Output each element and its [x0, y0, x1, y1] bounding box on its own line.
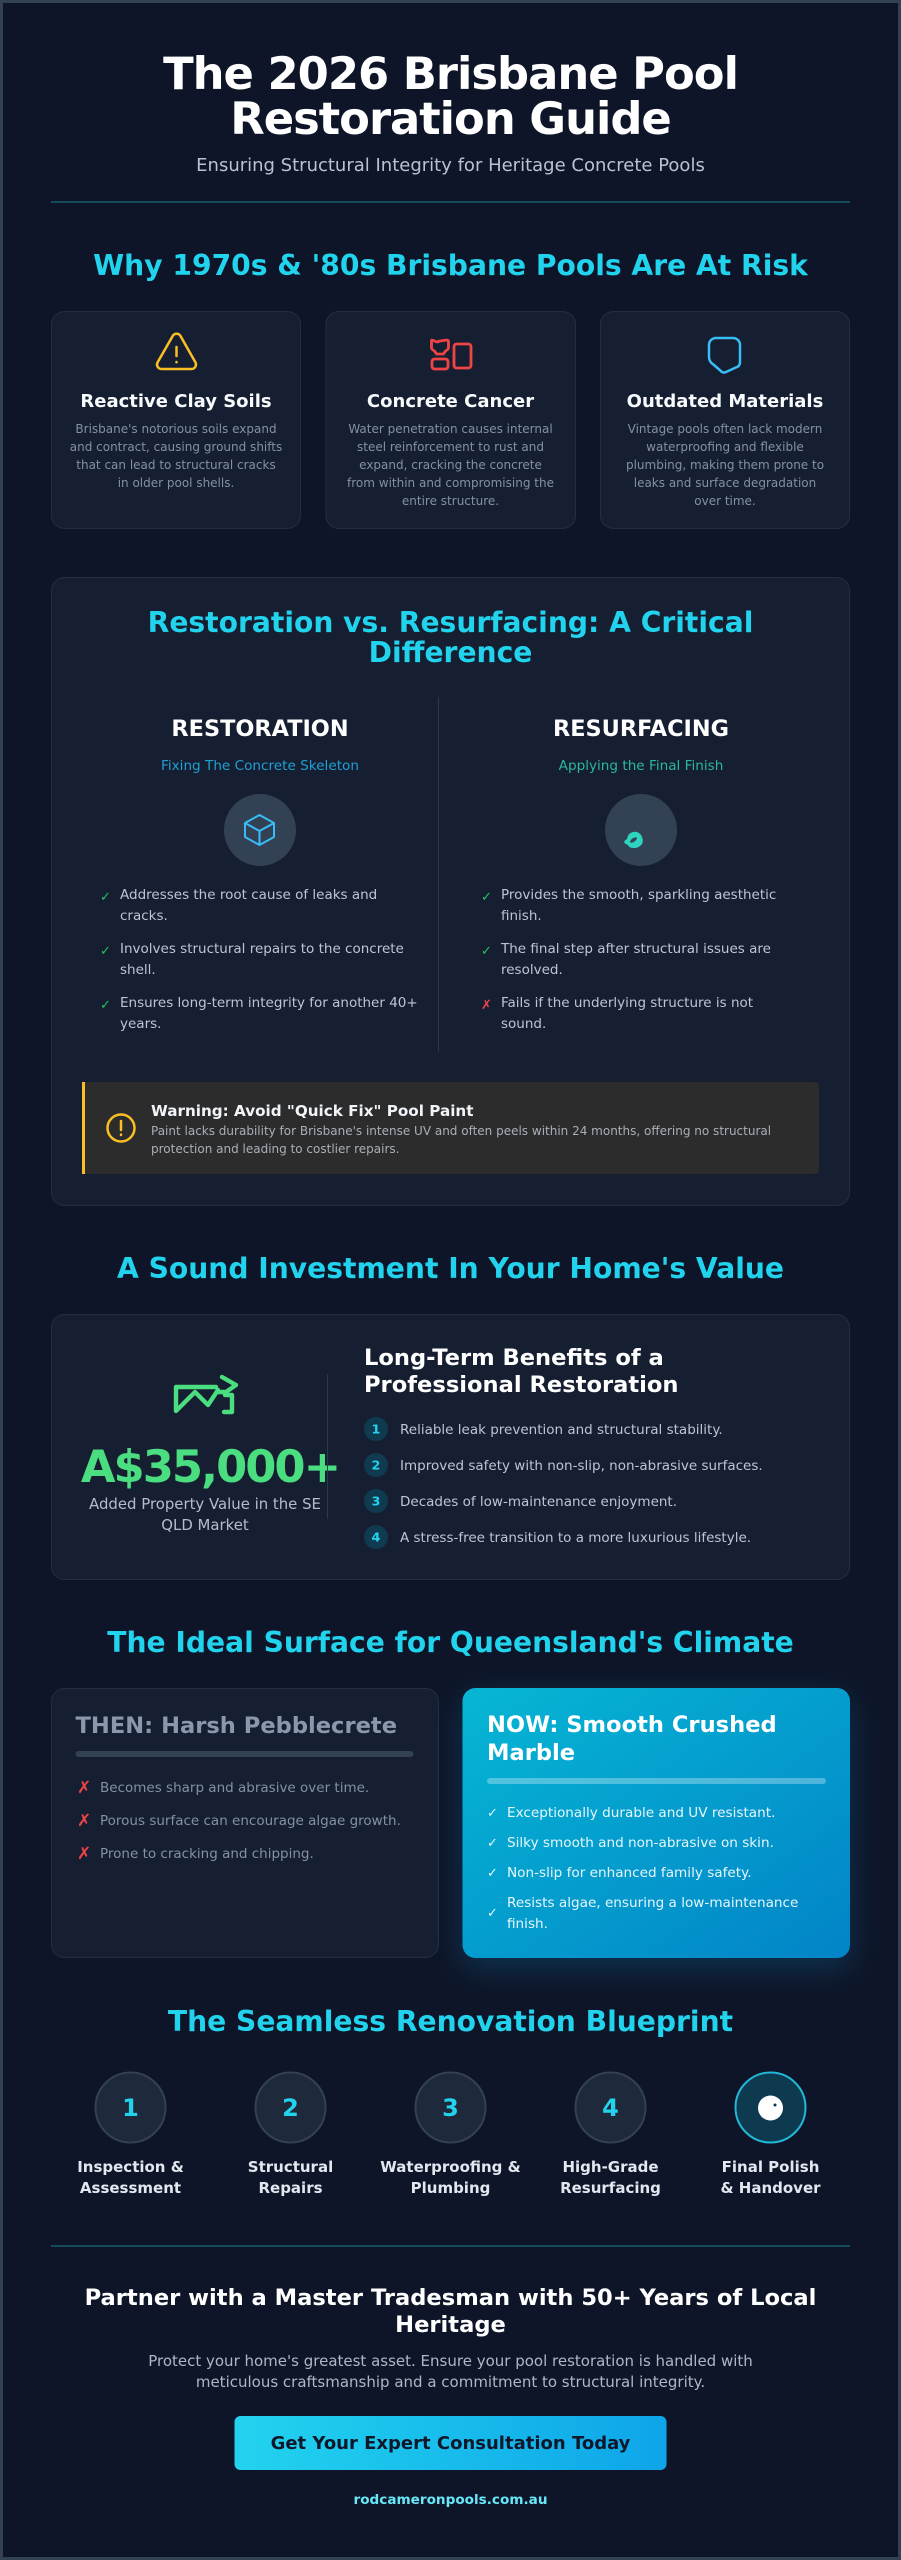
benefits list: 3	[372, 1494, 380, 1510]
step 1: Inspection &	[77, 2158, 184, 2176]
now list	[487, 1805, 798, 1932]
card text	[347, 422, 554, 508]
now list: ✓	[487, 1866, 498, 1881]
resurfacing list: Fails if the underlying structure is not	[501, 995, 753, 1011]
icon: warning triangle	[157, 334, 196, 369]
title	[163, 47, 738, 145]
step 4: Resurfacing	[560, 2179, 661, 2197]
step 1: 1	[122, 2094, 139, 2122]
benefits list: Decades of low-maintenance enjoyment.	[400, 1494, 677, 1510]
resurfacing list: sound.	[501, 1016, 546, 1032]
then list: Prone to cracking and chipping.	[100, 1846, 314, 1862]
panel: investment	[52, 1314, 850, 1580]
step 2: Structural	[248, 2158, 333, 2176]
step 2: 2	[282, 2094, 299, 2122]
restoration list: cracks.	[120, 908, 168, 924]
restoration list: Addresses the root cause of leaks and	[120, 887, 377, 903]
section heading: investment: A Sound Investment In Your Home's Value	[117, 1252, 784, 1285]
then list	[77, 1778, 401, 1864]
now list: Exceptionally durable and UV resistant.	[507, 1805, 775, 1821]
card text: in older pool shells.	[118, 476, 234, 490]
column subheading: Applying the Final Finish	[559, 758, 723, 774]
panel: restoration vs resurfacing	[52, 578, 850, 1206]
panel heading	[487, 1712, 777, 1766]
icon: shield	[709, 338, 740, 372]
card text	[70, 422, 282, 490]
panel heading: Difference	[369, 636, 532, 669]
cta text	[148, 2352, 753, 2391]
card text: entire structure.	[402, 494, 499, 508]
then list: Porous surface can encourage algae growth.	[100, 1813, 401, 1829]
title: The 2026 Brisbane Pool	[163, 47, 738, 100]
step 5: Final Polish	[722, 2158, 819, 2176]
card text: and contract, causing ground shifts	[70, 440, 282, 454]
warning text: protection and leading to costlier repairs.	[151, 1142, 399, 1156]
website: rodcameronpools.com.au	[353, 2492, 548, 2508]
step 2: Repairs	[258, 2179, 323, 2197]
card text: Brisbane's notorious soils expand	[75, 422, 277, 436]
cta heading	[85, 2285, 816, 2338]
cta text: meticulous craftsmanship and a commitment to structural integrity.	[196, 2373, 705, 2391]
then list: ✗	[77, 1844, 91, 1864]
call to action	[85, 2285, 816, 2508]
card text: Vintage pools often lack modern	[628, 422, 822, 436]
benefits heading	[364, 1345, 679, 1398]
panel: then pebblecrete	[52, 1688, 438, 1958]
now list: Silky smooth and non-abrasive on skin.	[507, 1835, 774, 1851]
step 3: 3	[442, 2094, 459, 2122]
now list: ✓	[487, 1836, 498, 1851]
then list: Becomes sharp and abrasive over time.	[100, 1780, 369, 1796]
resurfacing list: ✗	[481, 998, 492, 1013]
panel: concrete cancer	[326, 312, 576, 528]
panel heading: Marble	[487, 1740, 575, 1766]
panel heading: Restoration vs. Resurfacing: A Critical	[148, 606, 753, 639]
step 1: Assessment	[80, 2179, 181, 2197]
card text: leaks and surface degradation	[634, 476, 816, 490]
card text: over time.	[694, 494, 756, 508]
card text: Water penetration causes internal	[348, 422, 553, 436]
resurfacing list: The final step after structural issues are	[500, 941, 771, 957]
card text: that can lead to structural cracks	[76, 458, 276, 472]
resurfacing list: finish.	[501, 908, 542, 924]
step 1	[77, 2072, 184, 2197]
cta button	[234, 2416, 666, 2470]
benefits list	[364, 1417, 763, 1549]
card text: waterproofing and flexible	[646, 440, 804, 454]
resurfacing list	[481, 887, 776, 1032]
cta text: Protect your home's greatest asset. Ensure your pool restoration is handled with	[148, 2352, 753, 2370]
benefits list: 2	[372, 1458, 380, 1474]
benefits list: 1	[372, 1422, 381, 1438]
restoration list: Involves structural repairs to the concrete	[120, 941, 404, 957]
now list: Resists algae, ensuring a low-maintenance	[507, 1895, 798, 1911]
section heading: surface: The Ideal Surface for Queensland's Climate	[107, 1626, 794, 1659]
icon: rising chart	[176, 1377, 236, 1412]
now list: Non-slip for enhanced family safety.	[507, 1865, 752, 1881]
column: restoration	[100, 716, 418, 1032]
benefits list: A stress-free transition to a more luxurious lifestyle.	[400, 1530, 751, 1546]
panel: reactive clay soils	[52, 312, 300, 528]
big number: A$35,000+	[81, 1440, 339, 1493]
benefits list: 4	[372, 1530, 381, 1546]
panel heading: THEN: Harsh Pebblecrete	[76, 1713, 397, 1739]
then list: ✗	[77, 1811, 91, 1831]
step 3: Waterproofing &	[380, 2158, 521, 2176]
card title: Concrete Cancer	[367, 391, 534, 412]
subtitle: Ensuring Structural Integrity for Heritage Concrete Pools	[196, 155, 705, 176]
column: resurfacing	[481, 716, 776, 1032]
step 5	[720, 2072, 821, 2197]
card text: expand, cracking the concrete	[359, 458, 542, 472]
card title: Reactive Clay Soils	[80, 391, 272, 412]
big number caption: Added Property Value in the SE	[89, 1495, 321, 1513]
then list: ✗	[77, 1778, 91, 1798]
panel heading	[148, 606, 753, 669]
section heading: blueprint: The Seamless Renovation Blueprint	[168, 2005, 733, 2038]
benefits list: Reliable leak prevention and structural stability.	[400, 1422, 723, 1438]
header	[51, 47, 850, 203]
restoration list: ✓	[100, 998, 111, 1013]
panel: outdated materials	[600, 312, 850, 528]
step 3: Plumbing	[411, 2179, 490, 2197]
icon: cube	[224, 794, 296, 866]
step 4: 4	[602, 2094, 619, 2122]
restoration list: Ensures long-term integrity for another 40+	[120, 995, 418, 1011]
now list: ✓	[487, 1906, 498, 1921]
step 4	[560, 2072, 661, 2197]
title: Restoration Guide	[230, 92, 671, 145]
warning title: Warning: Avoid "Quick Fix" Pool Paint	[151, 1102, 473, 1120]
resurfacing list: ✓	[481, 890, 492, 905]
now list: ✓	[487, 1806, 498, 1821]
card title: Outdated Materials	[627, 391, 823, 412]
callout: warning	[82, 1082, 819, 1174]
cta heading: Partner with a Master Tradesman with 50+ Years of Local	[85, 2285, 816, 2311]
column heading: RESTORATION	[171, 716, 349, 742]
step 3	[380, 2072, 521, 2197]
resurfacing list: ✓	[481, 944, 492, 959]
resurfacing list: resolved.	[501, 962, 563, 978]
cta heading: Heritage	[395, 2312, 506, 2338]
panel heading: NOW: Smooth Crushed	[487, 1712, 777, 1738]
benefits list: Improved safety with non-slip, non-abrasive surfaces.	[400, 1458, 763, 1474]
benefits heading: Professional Restoration	[364, 1372, 679, 1398]
icon: warning circle	[108, 1114, 134, 1142]
icon: cracked blocks	[431, 340, 471, 369]
benefits heading: Long-Term Benefits of a	[364, 1345, 664, 1371]
section heading: risk: Why 1970s & '80s Brisbane Pools Are At Risk	[93, 249, 809, 282]
big number caption	[89, 1495, 321, 1534]
restoration list: ✓	[100, 890, 111, 905]
big number caption: QLD Market	[161, 1516, 249, 1534]
card text: plumbing, making them prone to	[626, 458, 824, 472]
restoration list: ✓	[100, 944, 111, 959]
step 5: & Handover	[720, 2179, 821, 2197]
now list: finish.	[507, 1916, 548, 1932]
column subheading: Fixing The Concrete Skeleton	[161, 758, 359, 774]
restoration list	[100, 887, 418, 1032]
card text: steel reinforcement to rust and	[357, 440, 544, 454]
restoration list: shell.	[120, 962, 156, 978]
panel: now crushed marble	[462, 1688, 850, 1958]
warning text: Paint lacks durability for Brisbane's intense UV and often peels within 24 months, offering no structural	[151, 1124, 771, 1138]
restoration list: years.	[120, 1016, 161, 1032]
resurfacing list: Provides the smooth, sparkling aesthetic	[501, 887, 776, 903]
card text: from within and compromising the	[347, 476, 554, 490]
column heading: RESURFACING	[553, 716, 729, 742]
card text	[626, 422, 824, 508]
icon: polish blob	[605, 794, 677, 866]
step 2	[248, 2072, 333, 2197]
cta button: Get Your Expert Consultation Today	[271, 2433, 631, 2454]
warning text	[151, 1124, 771, 1156]
step 4: High-Grade	[562, 2158, 659, 2176]
